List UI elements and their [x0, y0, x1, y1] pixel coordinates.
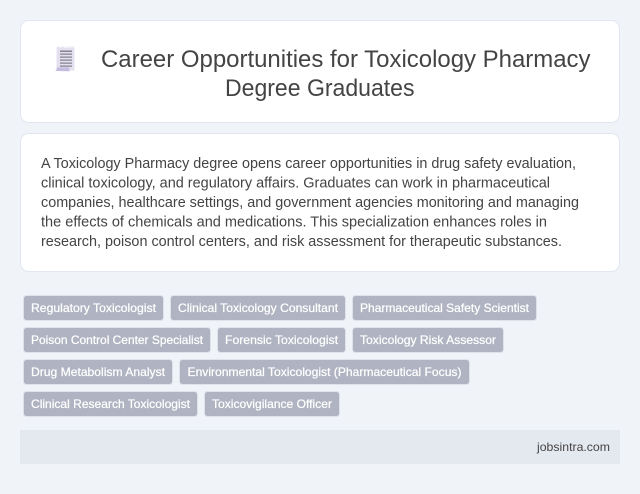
text block: description: companies, healthcare settings, and government agencies monitoring and managing [41, 195, 579, 211]
tag: Poison Control Center Specialist: Poison Control Center Specialist [31, 333, 204, 347]
tag: Toxicology Risk Assessor [352, 328, 504, 352]
text block: description: the effects of chemicals and medications. This specialization enhances roles in [41, 214, 547, 230]
panel: header [20, 20, 620, 122]
tag: Drug Metabolism Analyst: Drug Metabolism Analyst [31, 365, 166, 379]
tag: Clinical Research Toxicologist [24, 392, 198, 416]
icon: document scroll [55, 46, 74, 71]
tag: Poison Control Center Specialist [24, 328, 210, 352]
tag: Toxicology Risk Assessor: Toxicology Risk Assessor [360, 333, 496, 347]
tag: Regulatory Toxicologist: Regulatory Toxicologist [31, 301, 157, 315]
text block: description: research, poison control centers, and risk assessment for therapeutic substances. [41, 234, 562, 250]
tag: Regulatory Toxicologist [24, 296, 164, 320]
tag: Toxicovigilance Officer: Toxicovigilance Officer [212, 397, 332, 411]
tag: Pharmaceutical Safety Scientist: Pharmaceutical Safety Scientist [360, 301, 530, 315]
tag: Forensic Toxicologist [218, 328, 346, 352]
tag: Clinical Toxicology Consultant [170, 296, 346, 320]
text block: description [41, 156, 579, 250]
panel: description [20, 134, 620, 272]
tag: Toxicovigilance Officer [204, 392, 340, 416]
tag: Environmental Toxicologist (Pharmaceutical Focus) [180, 360, 470, 384]
text block: description: A Toxicology Pharmacy degree opens career opportunities in drug safety evaluation, [41, 156, 576, 172]
tag: Clinical Research Toxicologist: Clinical Research Toxicologist [31, 397, 191, 411]
tag: Clinical Toxicology Consultant: Clinical Toxicology Consultant [178, 301, 339, 315]
title [101, 46, 590, 102]
tag: Drug Metabolism Analyst [24, 360, 172, 384]
tag: Forensic Toxicologist: Forensic Toxicologist [225, 333, 339, 347]
tag: Pharmaceutical Safety Scientist [352, 296, 536, 320]
tag: Environmental Toxicologist (Pharmaceutical Focus): Environmental Toxicologist (Pharmaceutical Focus) [188, 365, 461, 379]
title: Career Opportunities for Toxicology Pharmacy [101, 46, 590, 73]
footer [20, 430, 620, 464]
tag list: career roles [24, 296, 536, 416]
title: Degree Graduates [225, 75, 414, 102]
footer text: site name: jobsintra.com [536, 440, 610, 454]
text block: description: clinical toxicology, and regulatory affairs. Graduates can work in pharmaceutical [41, 176, 550, 192]
